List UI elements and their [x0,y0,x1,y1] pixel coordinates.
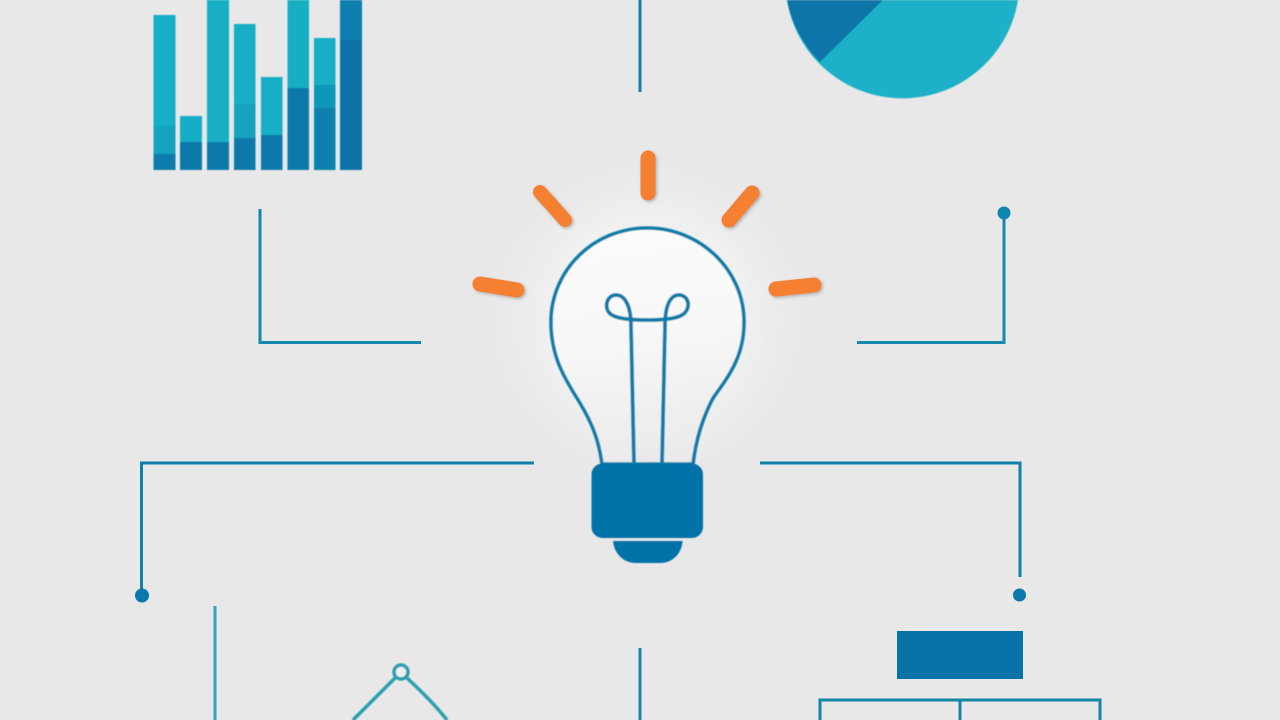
filament [607,295,688,464]
bar 3 [207,0,229,170]
connector: bottom centre [638,648,642,720]
connector: bottom left [214,606,216,720]
connector: upper right with dot [857,206,1010,342]
pie slice: teal [787,0,1018,98]
ray: right [776,285,814,289]
ray: top [640,158,656,193]
bulb base [592,464,703,538]
connector: lower left with dot [135,463,534,602]
pie chart [787,0,1018,98]
connector: upper left [260,209,421,342]
bar 2 [180,116,202,170]
bar 5 [261,77,282,170]
org chart top box [897,631,1023,679]
bar 6 [288,0,309,170]
connector: top centre [638,0,642,92]
bar 1 [154,15,176,170]
icon: light bulb [551,228,744,563]
bar 8 [340,0,362,170]
icon: network node [353,665,447,720]
pie slice: dark blue [787,0,883,62]
bar 4 [234,24,256,170]
ray: upper left [540,192,565,220]
connector: lower right with dot [760,463,1026,602]
org chart lower boxes [820,700,1100,720]
bar chart [154,0,362,170]
bulb glass [551,228,744,464]
ray: upper right [729,193,752,220]
bar 7 [314,38,336,170]
icon: light rays [480,158,814,290]
bulb tip [613,541,682,563]
org chart [820,631,1100,720]
ray: left [480,284,517,290]
